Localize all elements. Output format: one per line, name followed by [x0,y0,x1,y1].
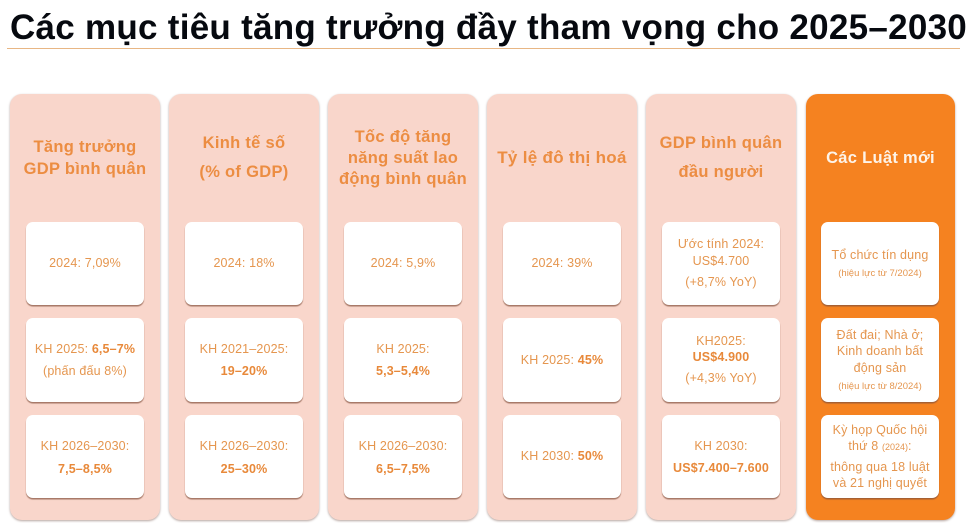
card: KH 2021–2025: 19–20% [221,364,267,378]
card: Ước tính 2024: (+8,7% YoY) [685,275,757,289]
heading: Tăng trưởng GDP: Tăng trưởng [33,138,137,156]
heading: GDP bình quân đầu người: GDP bình quân [660,134,782,152]
card: KH 2025 [26,318,144,402]
heading: Tăng trưởng GDP: GDP bình quân [24,160,146,178]
heading: GDP bình quân đầu người [660,134,782,181]
heading: Tốc độ tăng năng suất: Tốc độ tăng [355,128,451,146]
card: 2024 [185,222,303,305]
card: KH2025: KH2025: [696,334,746,348]
card: Đất đai; Nhà ở: Đất đai; Nhà ở; [837,328,923,342]
card: KH2025: (+4,3% YoY) [685,371,757,385]
card: Đất đai; Nhà ở: Kinh doanh bất [837,344,923,358]
card: KH2025: US$4.900 [693,350,749,364]
heading: Các Luật mới: Các Luật mới [826,149,935,167]
card: Đất đai; Nhà ở [821,318,939,402]
panel: GDP bình quân đầu người [646,94,796,520]
panel: Các Luật mới [806,94,955,520]
card: KH 2026–2030 [344,415,462,498]
card: 2024: 2024: 18% [213,256,275,270]
card: KH 2026–2030: 6,5–7,5% [376,462,430,476]
card: KH 2026–2030: 7,5–8,5% [58,462,112,476]
card: Tổ chức tín dụng: (hiệu lực từ 7/2024) [838,268,922,279]
card: Ước tính 2024 [662,222,780,305]
card: KH 2025: KH 2025: 6,5–7% [35,342,135,356]
card: Đất đai; Nhà ở: động sản [854,361,906,375]
card: KH 2030: KH 2030: 50% [521,449,603,463]
heading: Tốc độ tăng năng suất [339,128,467,188]
card: KH 2021–2025 [185,318,303,402]
card: Tổ chức tín dụng: Tổ chức tín dụng [832,248,928,262]
heading: Kinh tế số [199,134,289,181]
card: KH 2026–2030: 25–30% [221,462,267,476]
title: Các mục tiêu tăng trưởng đầy tham vọng cho 2025–2030 [10,8,967,47]
card: 2024: 2024: 39% [531,256,593,270]
card: KH 2030: US$7.400–7.600 [673,461,769,475]
card: KH 2026–2030: KH 2026–2030: [200,439,288,453]
card: KH 2025 [344,318,462,402]
card: Kỳ họp Quốc hội: Kỳ họp Quốc hội [833,423,927,437]
card: 2024 [344,222,462,305]
card: 2024: 2024: 5,9% [371,256,435,270]
panel: Tốc độ tăng năng suất lao động [328,94,478,520]
card: 2024: 2024: 7,09% [49,256,121,270]
card: KH 2026–2030 [185,415,303,498]
card: 2024 [26,222,144,305]
card: KH 2025 [503,318,621,402]
card: KH 2025: KH 2025: [376,342,430,356]
card: Kỳ họp Quốc hội [821,415,939,498]
heading: Tốc độ tăng năng suất: năng suất lao [348,149,458,167]
panel: Kinh tế số [169,94,319,520]
card: KH2025 [662,318,780,402]
card: Đất đai; Nhà ở: (hiệu lực từ 8/2024) [838,381,922,392]
card: Ước tính 2024: Ước tính 2024: [678,237,764,251]
card: KH 2025: KH 2025: 45% [521,353,603,367]
card: Kỳ họp Quốc hội: và 21 nghị quyết [833,476,927,490]
heading: Tốc độ tăng năng suất: động bình quân [339,170,467,188]
card: Kỳ họp Quốc hội: thứ 8 (2024): [848,439,912,453]
card: Ước tính 2024: US$4.700 [693,254,749,268]
card: 2024 [503,222,621,305]
heading: Tăng trưởng GDP [24,138,146,178]
card: KH 2026–2030: KH 2026–2030: [41,439,129,453]
card: KH 2026–2030: KH 2026–2030: [359,439,447,453]
heading: GDP bình quân đầu người: đầu người [678,163,764,181]
heading: Kinh tế số: (% of GDP) [199,163,289,181]
card: KH 2030 [503,415,621,498]
card: KH 2030: KH 2030: [694,439,748,453]
card: Kỳ họp Quốc hội: thông qua 18 luật [830,460,930,474]
card: KH 2026–2030 [26,415,144,498]
card: Tổ chức tín dụng [821,222,939,305]
panel: Tỷ lệ đô thị hoá [487,94,637,520]
card: KH 2025: 5,3–5,4% [376,364,430,378]
card: KH 2025: (phấn đấu 8%) [43,364,127,378]
panel: Tăng trưởng GDP bình quân [10,94,160,520]
card: KH 2021–2025: KH 2021–2025: [200,342,288,356]
card: KH 2030 [662,415,780,498]
heading: Kinh tế số: Kinh tế số [203,134,285,152]
heading: Tỷ lệ đô thị hoá: Tỷ lệ đô thị hoá [497,148,627,167]
